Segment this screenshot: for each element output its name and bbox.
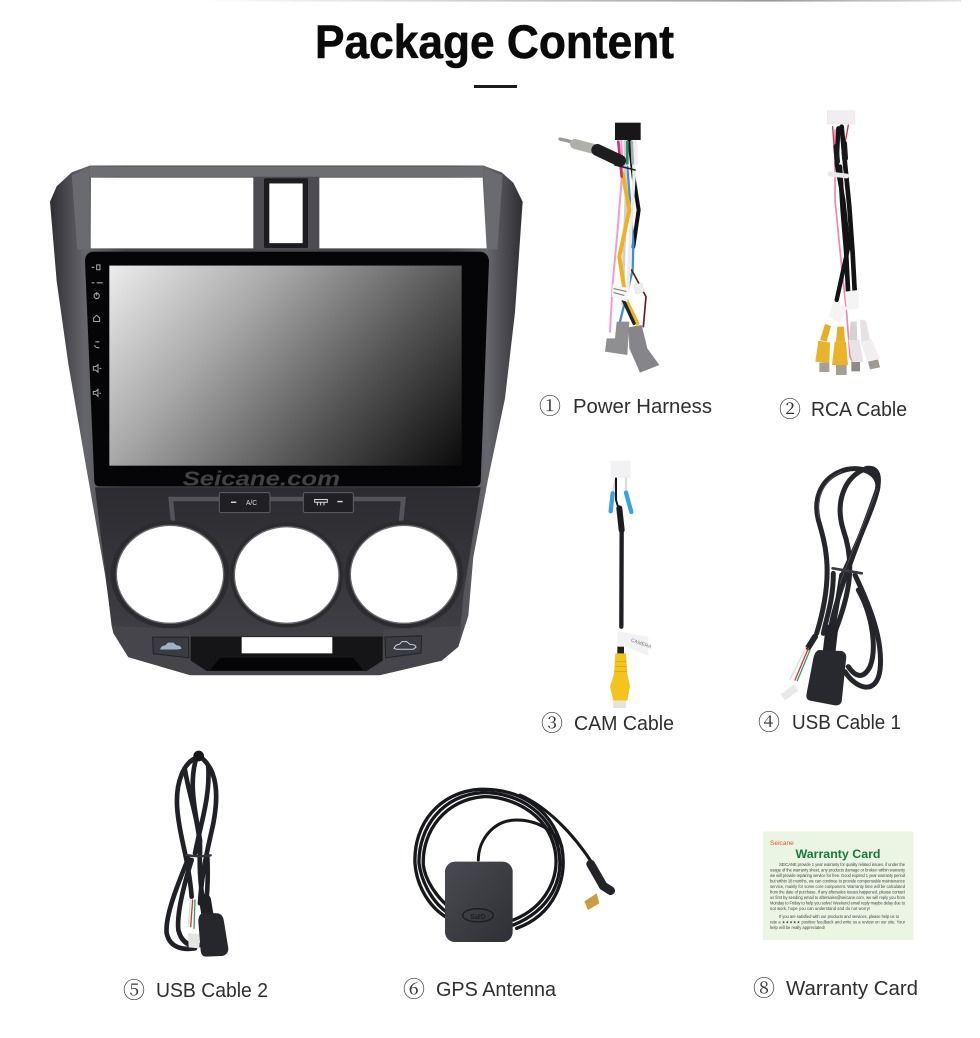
card body text: If you are satisfied with our products and services, please help us to — [779, 914, 900, 919]
antenna plug — [560, 139, 620, 161]
cable tie — [186, 855, 211, 856]
USB socket — [806, 650, 846, 705]
wire bundle — [610, 140, 646, 332]
CAM cable — [610, 461, 653, 708]
card body text: us first by sending email to aftersales@seicane.com, we will reply you from — [770, 895, 906, 900]
label flag — [617, 632, 648, 656]
USB cable 1 — [781, 468, 881, 705]
white and blue wires — [611, 478, 631, 512]
label: CAM cable — [541, 707, 674, 738]
grey connector left — [605, 322, 629, 355]
label: CAM cable: ③ — [541, 707, 563, 738]
button: rear defrost — [303, 493, 353, 513]
right dial opening — [345, 521, 463, 628]
card body text: service, mainly for some core component. Warranty time will be calculated — [770, 884, 906, 889]
grey connector right — [628, 325, 659, 373]
small white connector — [781, 684, 798, 701]
button: fresh air — [385, 636, 422, 658]
label: GPS antenna: GPS Antenna — [436, 979, 557, 1001]
wires — [830, 125, 857, 370]
small white connector — [188, 933, 200, 948]
panel body — [50, 166, 523, 675]
white header connector — [827, 111, 855, 124]
label: RCA cable: ② — [779, 393, 801, 424]
label: USB cable 1 — [758, 706, 901, 737]
card body text: rate a ★★★★★ positive feedback and write us a review on our site. Your — [770, 920, 906, 924]
card body text: usage of the warranty sheet, any products damage or broken within warranty — [770, 868, 906, 872]
white plug 1 — [848, 322, 863, 371]
centre dial opening — [230, 523, 343, 627]
lower control section — [95, 487, 481, 640]
connector housing — [611, 461, 631, 478]
title: Package Content — [315, 15, 674, 68]
coiled cable — [415, 789, 593, 928]
card body text: we will provide repairing service for free. Good expired 1 year warranty period — [770, 873, 906, 878]
label: power harness: Power Harness — [573, 396, 712, 418]
label: GPS antenna — [403, 973, 557, 1004]
label: USB cable 2: ⑤ — [123, 974, 145, 1005]
yellow plug 2 — [832, 327, 848, 375]
top edge line — [200, 0, 961, 2]
bare wires — [188, 900, 195, 928]
USB socket — [198, 913, 228, 957]
label: USB cable 1: USB Cable 1 — [792, 712, 901, 734]
climate trim line — [168, 497, 406, 522]
label: RCA cable — [779, 393, 907, 424]
left air vent opening — [91, 178, 253, 248]
black plug — [615, 123, 641, 140]
RCA cable — [815, 111, 880, 375]
label: warranty card: Warranty Card — [786, 978, 918, 1000]
label: power harness — [539, 390, 712, 421]
bottom slot — [191, 636, 383, 671]
brand: Seicane — [770, 840, 794, 847]
card background — [763, 832, 914, 940]
top knot — [193, 751, 204, 761]
button: A/C — [219, 493, 270, 513]
label: USB cable 2 — [123, 974, 268, 1005]
warranty card — [763, 832, 914, 940]
cable tie — [833, 568, 862, 573]
label: GPS antenna: ⑥ — [403, 973, 425, 1004]
label: USB cable 1: ④ — [758, 706, 780, 737]
SMA connector — [584, 864, 611, 910]
cable highlights — [818, 472, 877, 583]
right air vent opening — [319, 178, 487, 248]
flag text: CAMERA — [630, 638, 653, 651]
USB cable 2 — [167, 751, 228, 957]
label: warranty card: ⑧ — [753, 972, 775, 1003]
left dial opening — [111, 521, 229, 628]
lower corners — [112, 626, 461, 675]
watermark: Seicane.com — [183, 468, 340, 491]
yellow plug — [610, 647, 630, 708]
left shoulder trim — [72, 169, 89, 249]
card body text: help will be really appreciated! — [770, 925, 825, 930]
label: warranty card — [753, 972, 918, 1003]
cable loops — [167, 757, 216, 949]
label tag — [612, 284, 630, 302]
screen bezel — [85, 252, 489, 486]
label: CAM cable: CAM Cable — [574, 713, 674, 735]
centre slot opening — [269, 183, 303, 243]
card body text: but within 18 months, we can continue to provide compensable maintenance — [770, 878, 906, 884]
button: recirculation — [153, 637, 189, 658]
card heading: Warranty Card — [796, 847, 880, 861]
card body text: Monday to Friday to help you solve! Weekend email reply maybe delay due to — [770, 900, 906, 906]
label: power harness: ① — [539, 390, 561, 421]
button: A/C: A/C — [246, 500, 257, 507]
top trim strip — [90, 167, 483, 177]
label: USB cable 2: USB Cable 2 — [156, 980, 268, 1002]
centre slot surround — [264, 178, 308, 248]
power harness — [560, 123, 659, 373]
screen — [109, 266, 462, 466]
title underline — [474, 85, 517, 88]
bezel icons — [92, 265, 103, 396]
antenna module — [445, 862, 513, 942]
small white connector — [634, 283, 644, 294]
centre trim — [253, 177, 319, 249]
GPS antenna — [415, 789, 611, 942]
right shoulder trim — [484, 169, 503, 249]
bare wires — [790, 637, 815, 681]
card body text — [770, 862, 906, 930]
label: RCA cable: RCA Cable — [811, 399, 907, 421]
white plug 2 — [860, 319, 880, 369]
antenna module: GPS — [470, 912, 486, 921]
head unit panel — [50, 166, 523, 675]
black cable — [616, 478, 622, 627]
card body text: from the date of purchase. If any aftersales issues happened, please contact — [770, 890, 906, 894]
card body text: not work, hope you can understand and do not worry! — [770, 906, 870, 911]
strain relief — [205, 900, 207, 914]
card body text: SEICANE provide 1 year warranty for quality related issues, if under the — [779, 862, 906, 867]
strain relief — [829, 630, 832, 650]
yellow plug 1 — [815, 324, 831, 372]
label tags — [829, 290, 859, 323]
cable loops — [817, 468, 881, 687]
